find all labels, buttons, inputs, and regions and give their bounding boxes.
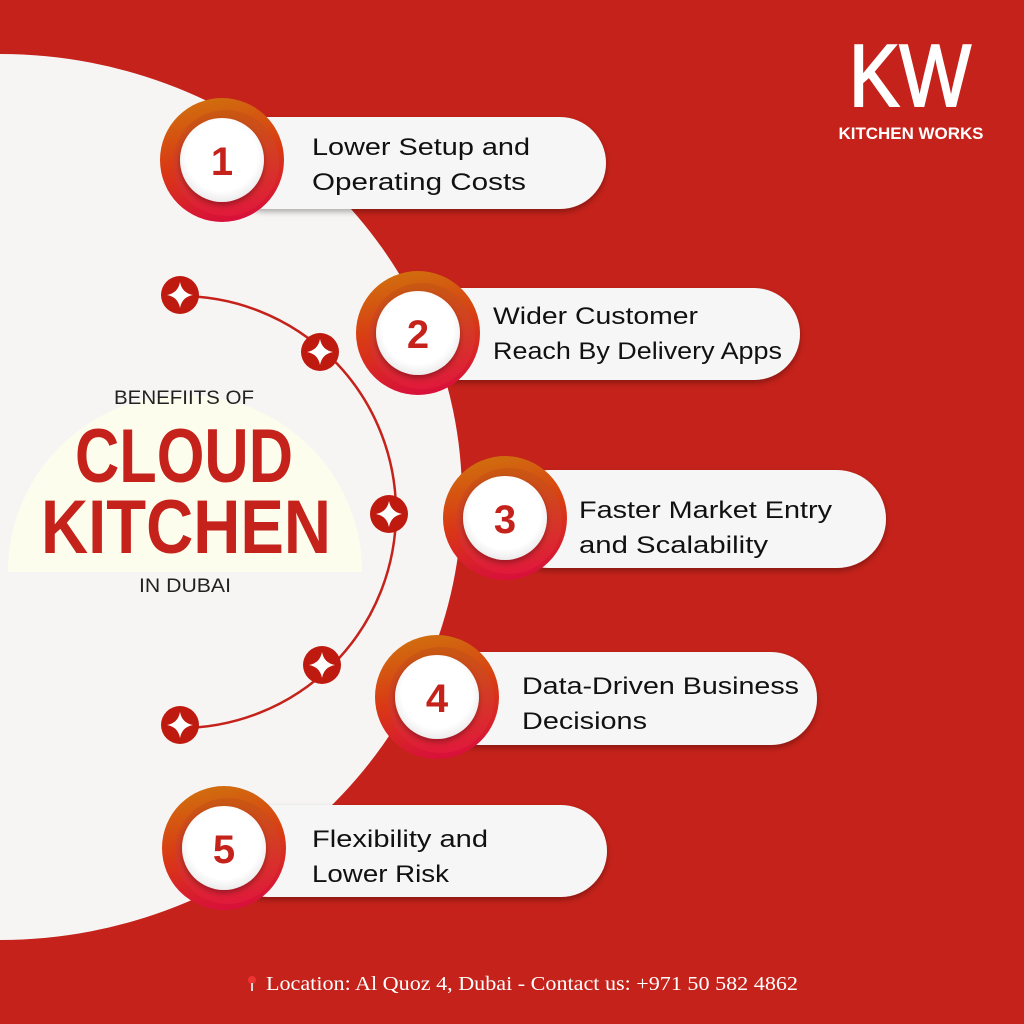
- item 3: and Scalability: [579, 532, 768, 559]
- item 1: [160, 98, 606, 222]
- item 1: Lower Setup and: [312, 134, 530, 161]
- title: CLOUD: [75, 414, 293, 499]
- footer: Location: Al Quoz 4, Dubai - Contact us: +971 50 582 4862: [266, 973, 798, 995]
- pale yellow semicircle: [8, 395, 362, 572]
- item 3: 3: [494, 498, 516, 542]
- arc connector: [180, 296, 396, 728]
- title: [41, 388, 331, 597]
- title: BENEFIITS OF: [114, 388, 254, 409]
- title: IN DUBAI: [139, 576, 231, 597]
- arc dots: [161, 276, 408, 744]
- item 5: 5: [213, 828, 235, 872]
- item 5: Flexibility and: [312, 826, 488, 853]
- item 2: 2: [407, 313, 429, 357]
- item 2: Reach By Delivery Apps: [493, 338, 782, 365]
- item 2: [356, 271, 800, 395]
- logo: KW: [849, 26, 971, 125]
- item 4: Data-Driven Business: [522, 673, 799, 700]
- item 5: [162, 786, 607, 910]
- title: KITCHEN: [41, 485, 331, 570]
- item 1: 1: [211, 140, 233, 184]
- item 4: [375, 635, 817, 759]
- logo: KITCHEN WORKS: [838, 124, 984, 143]
- item 2: Wider Customer: [493, 303, 698, 330]
- item 1: Operating Costs: [312, 169, 526, 196]
- item 4: 4: [426, 677, 449, 721]
- item 5: Lower Risk: [312, 861, 450, 888]
- item 3: Faster Market Entry: [579, 497, 832, 524]
- item 3: [443, 456, 886, 580]
- item 4: Decisions: [522, 708, 647, 735]
- white background ellipse: [0, 54, 462, 940]
